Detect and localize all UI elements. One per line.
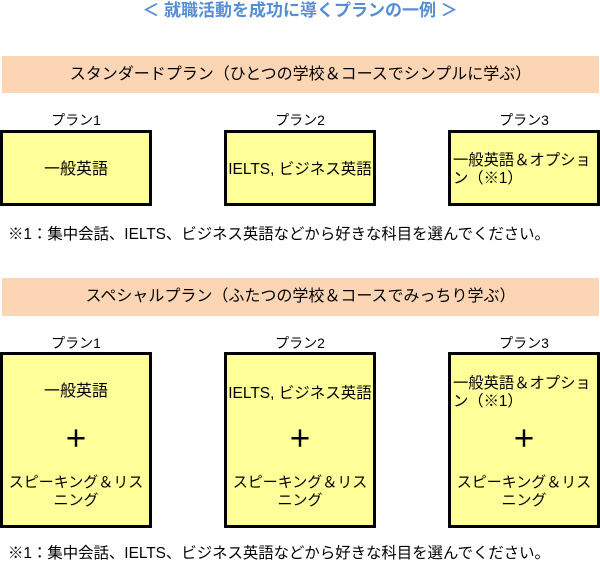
- course: speaking and listening: スピーキング＆リスニング: [233, 474, 367, 509]
- heading: special plan: [2, 278, 599, 316]
- label: standard plan 1: プラン1: [51, 112, 101, 128]
- course: speaking and listening: スピーキング＆リスニング: [457, 474, 591, 509]
- footnote: special: ※1：集中会話、IELTS、ビジネス英語などから好きな科目を選んでください。: [8, 545, 550, 562]
- panel: special plan 2: [224, 352, 376, 528]
- panel: standard plan 1: [0, 130, 152, 206]
- course: general English: 一般英語: [44, 383, 108, 400]
- label: standard plan 2: プラン2: [275, 112, 325, 128]
- plus sign: ＋: [288, 426, 312, 453]
- label: special plan 3: プラン3: [499, 335, 549, 351]
- panel: special plan 3: [448, 352, 600, 528]
- course: IELTS and business English: IELTS, ビジネス英語: [228, 385, 372, 402]
- heading: special plan: スペシャルプラン（ふたつの学校＆コースでみっちり学ぶ）: [85, 288, 516, 305]
- title: ＜ 就職活動を成功に導くプランの一例 ＞: [142, 1, 458, 20]
- course: speaking and listening: スピーキング＆リスニング: [9, 474, 143, 509]
- panel: standard plan 2: [224, 130, 376, 206]
- panel: standard plan 3: [448, 130, 600, 206]
- heading: standard plan: [2, 56, 599, 93]
- panel: special plan 1: [0, 352, 152, 528]
- panel: standard plan 1: 一般英語: [44, 161, 108, 178]
- heading: standard plan: スタンダードプラン（ひとつの学校＆コースでシンプルに学ぶ）: [70, 66, 531, 83]
- label: special plan 1: プラン1: [51, 335, 101, 351]
- footnote: standard: ※1：集中会話、IELTS、ビジネス英語などから好きな科目を選んでください。: [8, 226, 550, 243]
- plus sign: ＋: [512, 426, 536, 453]
- panel: standard plan 3: 一般英語＆オプション（※1）: [453, 152, 591, 187]
- label: special plan 2: プラン2: [275, 335, 325, 351]
- plus sign: ＋: [64, 426, 88, 453]
- panel: standard plan 2: IELTS, ビジネス英語: [228, 161, 372, 178]
- label: standard plan 3: プラン3: [499, 112, 549, 128]
- course: general English and option: 一般英語＆オプション（※1）: [453, 375, 591, 410]
